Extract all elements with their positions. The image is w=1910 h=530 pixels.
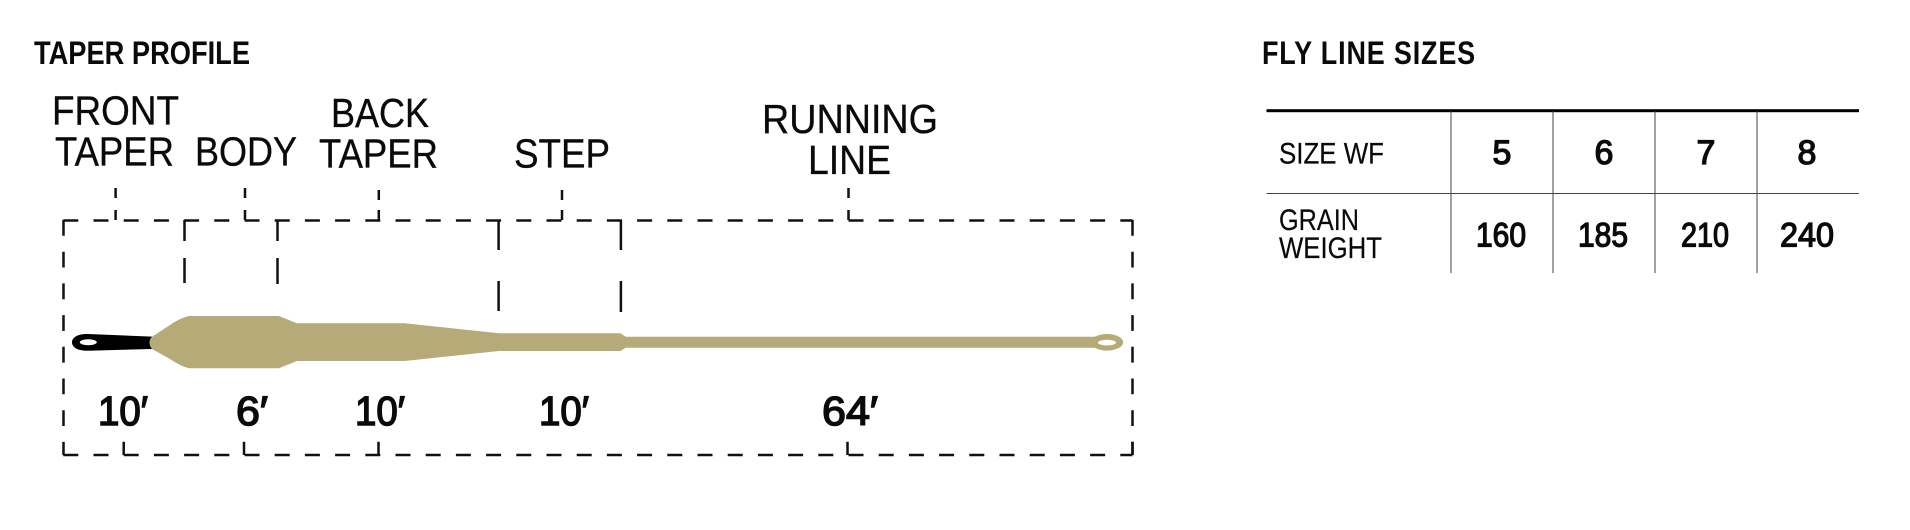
length: back taper 10 ft: 10′ bbox=[355, 388, 405, 434]
table rules bbox=[1266, 109, 1859, 273]
length: body 6 ft: 6′ bbox=[236, 388, 268, 434]
panel: taper profile bbox=[34, 35, 1132, 455]
label: running line: LINE bbox=[808, 137, 891, 183]
row: grain weight: 210 bbox=[1681, 217, 1729, 255]
label: front taper bbox=[52, 88, 179, 174]
label: running line: RUNNING bbox=[762, 96, 938, 142]
row: size WF: 7 bbox=[1697, 134, 1715, 172]
black tip with welded loop bbox=[72, 334, 152, 351]
row: grain weight: 240 bbox=[1780, 217, 1834, 255]
fly line taper diagram bbox=[72, 316, 1123, 368]
dashed bracket frame bbox=[63, 188, 1132, 455]
panel: fly line sizes bbox=[1262, 35, 1859, 273]
label: body: BODY bbox=[195, 128, 297, 174]
row: grain weight: 160 bbox=[1476, 217, 1526, 255]
heading: taper profile: TAPER PROFILE bbox=[34, 35, 250, 71]
label: front taper: FRONT bbox=[52, 88, 179, 134]
length: front taper 10 ft: 10′ bbox=[98, 388, 148, 434]
label: front taper: TAPER bbox=[55, 128, 174, 174]
section lengths bbox=[98, 388, 878, 434]
row: grain weight: GRAIN bbox=[1279, 204, 1359, 237]
row: grain weight bbox=[1279, 204, 1834, 265]
row: size WF: SIZE WF bbox=[1279, 137, 1384, 170]
tan line body bbox=[150, 316, 1095, 368]
row: size WF: 5 bbox=[1493, 134, 1511, 172]
label: back taper: TAPER bbox=[319, 130, 438, 176]
label: back taper bbox=[319, 90, 438, 176]
rear loop bbox=[1091, 334, 1123, 351]
length: running line 64 ft: 64′ bbox=[822, 388, 878, 434]
row: size WF: 8 bbox=[1798, 134, 1816, 172]
label: back taper: BACK bbox=[331, 90, 429, 136]
label: step: STEP bbox=[514, 130, 610, 176]
heading: fly line sizes: FLY LINE SIZES bbox=[1262, 35, 1476, 71]
sizes table bbox=[1266, 109, 1859, 273]
row: size WF: 6 bbox=[1595, 134, 1613, 172]
length: step 10 ft: 10′ bbox=[539, 388, 589, 434]
row: grain weight: WEIGHT bbox=[1279, 232, 1382, 265]
row: grain weight: 185 bbox=[1578, 217, 1628, 255]
row: size WF bbox=[1279, 134, 1816, 172]
section labels bbox=[52, 88, 938, 183]
label: running line bbox=[762, 96, 938, 183]
